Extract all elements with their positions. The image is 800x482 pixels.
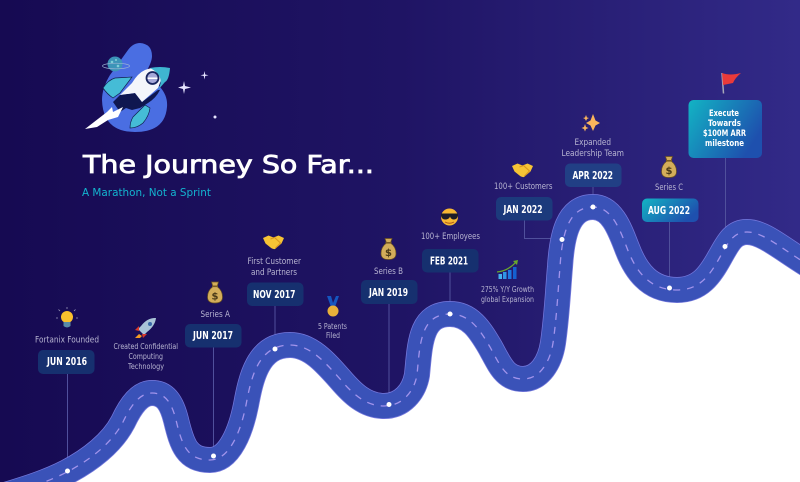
date: AUG 2022	[648, 205, 690, 217]
date badge	[565, 164, 622, 187]
label: Leadership Team	[562, 149, 624, 159]
label	[562, 138, 624, 159]
label	[248, 257, 301, 278]
label: Series B	[374, 267, 403, 277]
milestone: Nov 2017	[247, 236, 304, 306]
icon: money bag: $	[666, 166, 673, 177]
label: Filed	[326, 331, 340, 340]
goal text: Towards	[708, 119, 741, 129]
title: The Journey So Far...	[82, 150, 374, 179]
label: Series C	[655, 183, 683, 193]
date badge	[185, 324, 242, 348]
milestone: Jun 2016	[35, 307, 99, 374]
icon: sunglasses face	[441, 208, 458, 226]
milestone: goal	[688, 73, 762, 158]
label: 100+ Customers	[494, 182, 553, 192]
date: JUN 2016	[46, 356, 87, 368]
goal text: Execute	[709, 109, 739, 119]
label	[481, 285, 534, 304]
date: JAN 2019	[368, 287, 408, 299]
date badge	[361, 280, 418, 304]
subtitle: A Marathon, Not a Sprint	[82, 186, 212, 199]
icon: money bag: $	[212, 292, 219, 302]
white ground under road	[0, 207, 800, 482]
label	[114, 342, 178, 371]
icon: money bag: $	[385, 248, 392, 259]
goal text: milestone	[705, 139, 744, 149]
label: and Partners	[251, 268, 297, 278]
label: Series A	[200, 310, 230, 320]
label: Created Confidential	[114, 342, 178, 351]
date: JUN 2017	[192, 330, 233, 342]
milestone: Apr 2022	[562, 114, 624, 187]
label: Computing	[128, 352, 163, 361]
date: JAN 2022	[503, 204, 542, 216]
road	[0, 207, 800, 482]
label: 100+ Employees	[421, 232, 480, 242]
label: First Customer	[248, 257, 301, 267]
date badge	[38, 350, 94, 374]
date: APR 2022	[572, 170, 613, 182]
icon: medal	[327, 296, 339, 316]
icon: handshake	[263, 236, 284, 249]
date badge	[496, 197, 552, 220]
goal text	[703, 109, 746, 149]
date: NOV 2017	[253, 289, 296, 301]
date badge	[422, 249, 478, 272]
goal box	[688, 100, 762, 158]
label: 275% Y/Y Growth	[481, 285, 534, 294]
label: Technology	[127, 362, 164, 371]
icon: red flag	[722, 73, 741, 94]
label: 5 Patents	[318, 322, 347, 331]
milestone: confidential computing	[114, 318, 178, 371]
milestone: Jan 2022	[494, 164, 553, 220]
label: Fortanix Founded	[35, 336, 99, 346]
label	[318, 322, 347, 340]
connector lines	[68, 158, 726, 471]
milestone: Jan 2019	[361, 238, 418, 304]
date badge	[642, 198, 698, 222]
icon: light bulb	[56, 307, 78, 328]
icon: handshake	[512, 164, 533, 177]
icon: growth chart	[497, 260, 518, 279]
stars	[178, 71, 216, 118]
label: global Expansion	[481, 295, 534, 304]
road milestone dots	[65, 204, 728, 474]
milestone: patents	[318, 296, 347, 340]
milestone: Aug 2022	[642, 156, 698, 222]
milestone: Feb 2021	[421, 208, 480, 272]
rocket logo illustration	[85, 43, 170, 132]
goal text: $100M ARR	[703, 129, 746, 139]
label: Expanded	[574, 138, 611, 148]
milestone: growth	[481, 260, 534, 304]
milestone: Jun 2017	[185, 282, 242, 348]
icon: sparkles	[582, 114, 600, 132]
date: FEB 2021	[430, 256, 468, 268]
icon: rocket	[135, 318, 156, 338]
planet	[102, 56, 130, 72]
date badge	[247, 282, 304, 306]
